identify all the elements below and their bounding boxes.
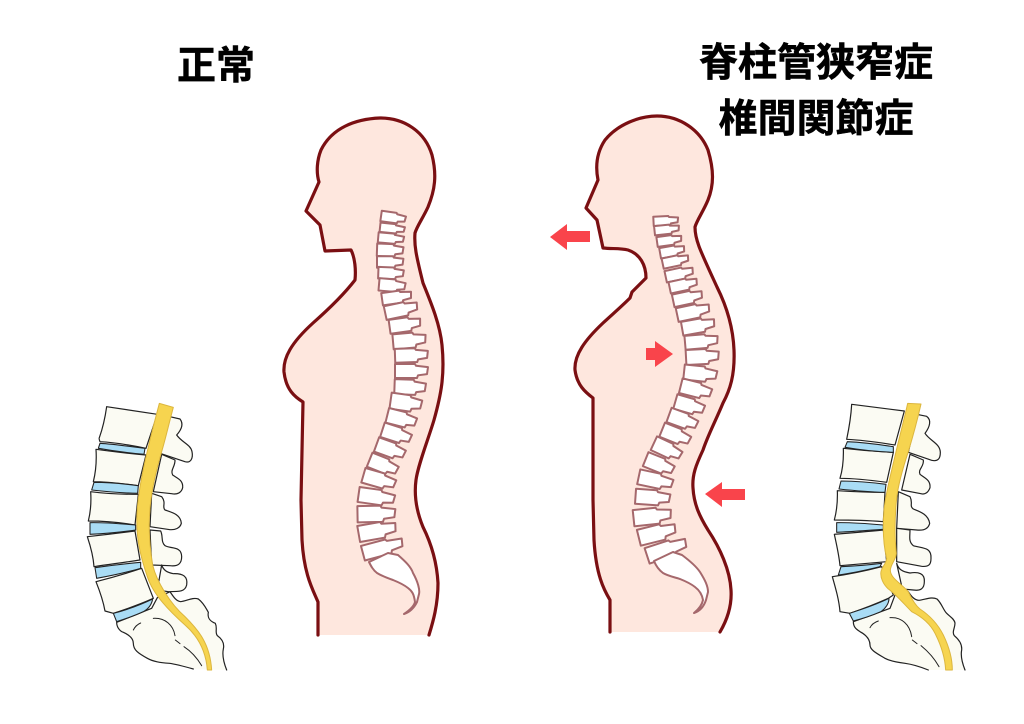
sacrum inner lines	[870, 621, 878, 628]
discs	[98, 443, 145, 454]
sacrum: normal	[369, 553, 419, 614]
discs	[845, 442, 893, 452]
sacrum	[853, 592, 965, 670]
lumbar spine illustration: normal	[87, 403, 227, 670]
sacrum: stenosis	[654, 552, 708, 613]
processes	[908, 414, 940, 461]
title: normal: 正常	[177, 45, 255, 88]
spinal cord	[137, 403, 212, 670]
title: facet joint disease: 椎間関節症	[718, 98, 914, 141]
vertebral bodies	[99, 407, 157, 448]
figure: normal body silhouette	[284, 118, 443, 635]
arrow: chest inward	[646, 341, 673, 367]
processes	[160, 417, 192, 462]
arrow: lower back inward	[705, 482, 745, 507]
sacrum inner lines	[133, 623, 141, 630]
sacrum	[117, 592, 227, 670]
spine: normal	[357, 211, 428, 614]
figure: stenosis body silhouette	[575, 116, 734, 632]
lumbar spine illustration: stenosis	[832, 403, 965, 670]
arrow: neck forward	[550, 224, 590, 250]
title: spinal stenosis: 脊柱管狭窄症	[699, 42, 933, 85]
vertebral bodies	[847, 404, 904, 445]
spinal cord	[881, 403, 952, 670]
spine: stenosis	[633, 215, 719, 613]
